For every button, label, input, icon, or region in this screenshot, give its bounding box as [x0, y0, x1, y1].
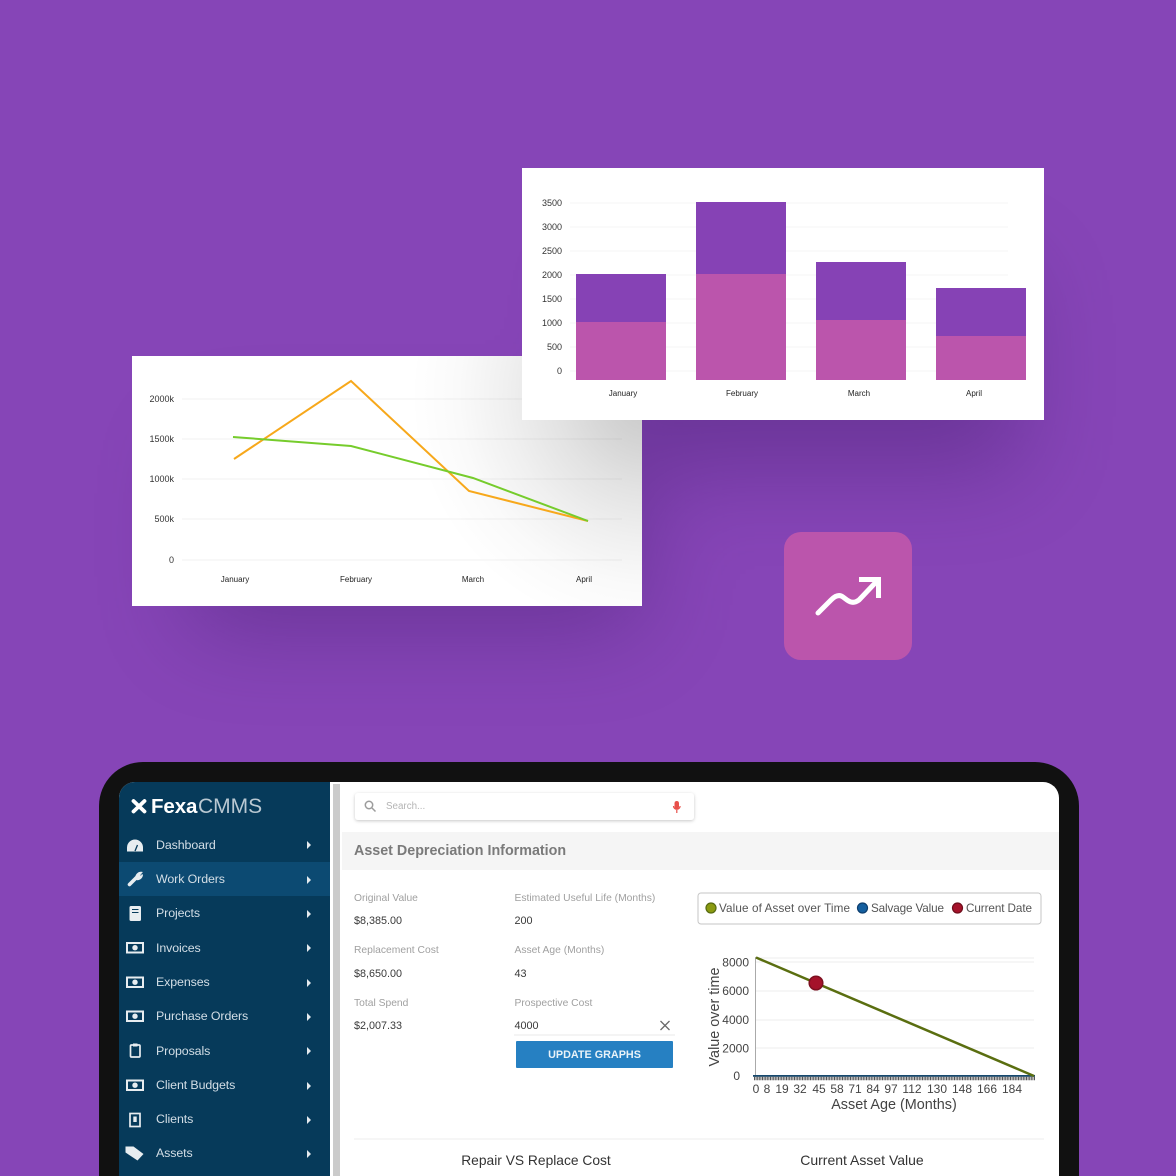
- y axis title: Value over time: [707, 968, 723, 1066]
- asset details left column: $8,650.00: [354, 968, 402, 980]
- x axis labels: 45: [812, 1082, 826, 1096]
- menu: Expenses: Expenses: [156, 975, 210, 989]
- asset details left column: $2,007.33: [354, 1020, 402, 1032]
- y axis labels: 1500: [542, 294, 562, 304]
- menu: Projects: Projects: [156, 906, 200, 920]
- y axis labels: 500: [547, 342, 562, 352]
- asset details right column: 43: [514, 968, 527, 980]
- y axis labels: [149, 394, 174, 565]
- asset details right column: Asset Age (Months): [514, 945, 604, 956]
- x axis title: Asset Age (Months): [831, 1097, 957, 1113]
- current date marker: [809, 976, 823, 990]
- icon: clear: [660, 1021, 670, 1030]
- y axis labels: 1500k: [149, 434, 174, 444]
- x axis labels: April: [966, 389, 982, 398]
- menu: Dashboard: [127, 840, 311, 852]
- value line: [756, 958, 1034, 1076]
- heading: repair vs replace: Repair VS Replace Cost: [461, 1153, 611, 1168]
- legend: [698, 893, 1041, 924]
- menu: Assets: [126, 1146, 311, 1160]
- x axis labels: 148: [952, 1082, 972, 1096]
- y axis labels: 1000k: [149, 474, 174, 484]
- x axis labels: February: [726, 389, 758, 398]
- asset details left column: Replacement Cost: [354, 945, 439, 956]
- x axis labels: March: [462, 575, 484, 584]
- menu: Work Orders: [130, 872, 311, 886]
- menu: Expenses: [126, 976, 311, 988]
- y axis labels: 2500: [542, 246, 562, 256]
- panel: stacked bar chart: [522, 168, 1044, 420]
- x axis labels: 166: [977, 1082, 997, 1096]
- asset details left column: [354, 893, 439, 1032]
- x axis labels: [221, 575, 592, 584]
- heading: current asset value: Current Asset Value: [800, 1152, 924, 1168]
- x axis labels: [609, 389, 982, 398]
- x axis labels: 112: [902, 1082, 922, 1096]
- icon: trending up badge: [784, 532, 912, 660]
- y axis labels: 3500: [542, 198, 562, 208]
- y axis labels: 4000: [722, 1013, 749, 1027]
- menu: Purchase Orders: Purchase Orders: [156, 1009, 248, 1023]
- y axis labels: 2000: [542, 270, 562, 280]
- x axis labels: March: [848, 389, 870, 398]
- y axis labels: 500k: [154, 514, 174, 524]
- y axis labels: 0: [169, 555, 174, 565]
- x axis labels: 97: [884, 1082, 898, 1096]
- x axis labels: 130: [927, 1082, 947, 1096]
- asset details right column: Prospective Cost: [514, 998, 592, 1009]
- logo: [132, 798, 262, 814]
- x axis labels: 58: [830, 1082, 844, 1096]
- logo: Fexa: [151, 795, 198, 818]
- icon: magnifier: [365, 801, 376, 812]
- x axis labels: April: [576, 575, 592, 584]
- button: update graphs: UPDATE GRAPHS: [548, 1049, 641, 1061]
- y axis labels: [542, 198, 562, 376]
- y axis labels: 0: [557, 366, 562, 376]
- panel: line chart: [132, 356, 642, 606]
- menu: Proposals: Proposals: [156, 1044, 210, 1058]
- legend: Salvage Value: [871, 902, 944, 915]
- menu: Assets: Assets: [156, 1146, 193, 1160]
- x axis labels: [753, 1082, 1022, 1096]
- menu: Projects: [130, 906, 311, 921]
- asset details left column: Original Value: [354, 893, 418, 904]
- menu: Clients: Clients: [156, 1112, 193, 1126]
- asset details right column: [514, 893, 675, 1035]
- asset details right column: Estimated Useful Life (Months): [514, 893, 655, 904]
- section header: [342, 832, 1059, 870]
- scrollbar: [333, 784, 340, 1176]
- button: update graphs: [516, 1041, 673, 1068]
- y axis labels: 2000: [722, 1042, 749, 1056]
- asset details left column: $8,385.00: [354, 915, 402, 927]
- salvage value baseline: [753, 1075, 1035, 1077]
- y axis labels: 0: [733, 1069, 740, 1083]
- icon: microphone: [674, 801, 680, 813]
- x axis labels: January: [609, 389, 637, 398]
- asset details right column: 4000: [514, 1020, 539, 1032]
- x axis labels: 184: [1002, 1082, 1022, 1096]
- search bar: Search...: [386, 801, 425, 812]
- menu: Invoices: [126, 942, 311, 954]
- menu: Client Budgets: Client Budgets: [156, 1078, 235, 1092]
- x axis labels: 8: [764, 1082, 771, 1096]
- depreciation chart: [707, 956, 1035, 1113]
- orange series: [234, 381, 588, 521]
- bar: February: [696, 202, 786, 380]
- bar: March: [816, 262, 906, 380]
- y axis labels: [722, 956, 749, 1083]
- x axis labels: 71: [848, 1082, 862, 1096]
- asset details left column: Total Spend: [354, 998, 409, 1009]
- bar: April: [936, 288, 1026, 380]
- logo: CMMS: [198, 795, 262, 818]
- section header: Asset Depreciation Information: [354, 843, 566, 859]
- menu: Clients: [130, 1112, 311, 1126]
- x axis labels: 84: [866, 1082, 880, 1096]
- card shadows: [190, 270, 1020, 630]
- legend: Current Date: [966, 902, 1032, 915]
- menu: Proposals: [130, 1044, 311, 1058]
- green series: [233, 437, 588, 521]
- bar: January: [576, 274, 666, 380]
- active row highlight: [119, 862, 330, 896]
- y axis labels: 8000: [722, 956, 749, 970]
- x axis labels: January: [221, 575, 249, 584]
- x axis labels: 32: [793, 1082, 807, 1096]
- menu: Work Orders: Work Orders: [156, 872, 225, 886]
- y axis labels: 3000: [542, 222, 562, 232]
- x axis labels: 19: [775, 1082, 789, 1096]
- menu: Client Budgets: [126, 1080, 311, 1092]
- menu: Purchase Orders: [126, 1010, 311, 1022]
- y axis labels: 2000k: [149, 394, 174, 404]
- x axis labels: 0: [753, 1082, 760, 1096]
- sidebar: [119, 782, 330, 1176]
- menu: Invoices: Invoices: [156, 941, 201, 955]
- search bar: [355, 793, 694, 820]
- y axis labels: 1000: [542, 318, 562, 328]
- x axis labels: February: [340, 575, 372, 584]
- y axis labels: 6000: [722, 984, 749, 998]
- legend: Value of Asset over Time: [719, 902, 850, 915]
- asset details right column: 200: [514, 915, 533, 927]
- menu: Dashboard: Dashboard: [156, 838, 216, 852]
- tablet frame: [99, 762, 1079, 1176]
